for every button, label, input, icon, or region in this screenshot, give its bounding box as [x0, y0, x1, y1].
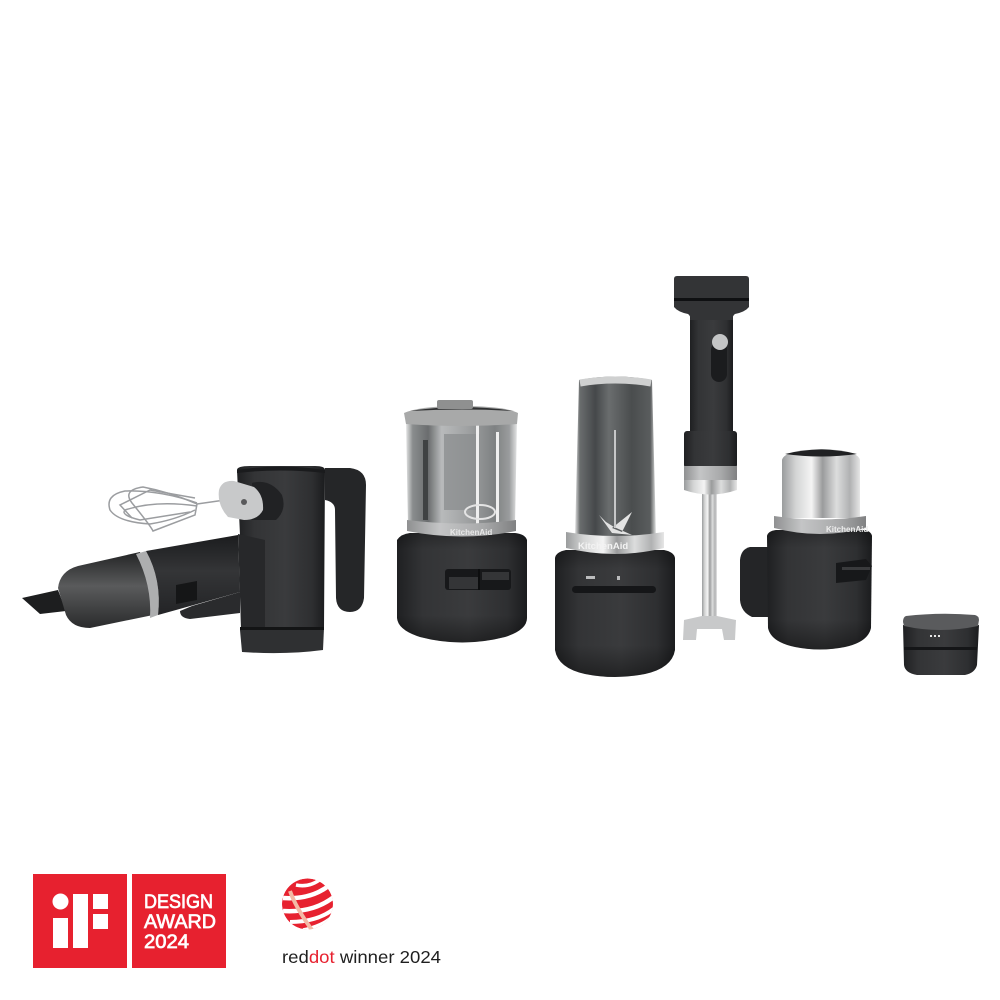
vacuum silver ring [136, 551, 159, 618]
design award square: DESIGN [144, 892, 213, 913]
mixer body side facet [238, 534, 265, 628]
chopper base [397, 533, 527, 642]
hand blender switch [711, 342, 727, 382]
mixer handle [325, 468, 366, 612]
chopper blades [465, 505, 495, 519]
chopper lid knob [437, 400, 473, 409]
vacuum vent [176, 581, 197, 604]
grinder battery [740, 547, 770, 617]
mixer top rim [237, 466, 325, 473]
design award square [132, 874, 226, 968]
blender cup [575, 376, 656, 537]
charger lights [930, 635, 940, 637]
charger body [903, 625, 979, 675]
iF design award badge [33, 874, 226, 968]
vacuum transparent canister [58, 552, 158, 628]
red dot sphere [282, 878, 335, 930]
product: food chopper [397, 400, 527, 642]
blender ring [566, 532, 664, 554]
mixer drive socket [219, 481, 263, 520]
chopper ring [407, 520, 516, 536]
chopper switch [445, 569, 511, 590]
product: hand vacuum [22, 535, 240, 628]
product: battery charger [903, 614, 979, 675]
mixer whisk [109, 487, 225, 531]
grinder steel bowl [782, 449, 860, 518]
hand blender collar [684, 431, 737, 468]
blender logo: KitchenAid [578, 541, 628, 552]
hand blender head [674, 276, 749, 320]
product: coffee grinder [740, 449, 872, 650]
hand blender foot [683, 616, 736, 640]
chopper glass bowl [406, 420, 517, 525]
blender base [555, 550, 675, 677]
red dot caption: reddot winner 2024 [282, 947, 441, 967]
product: personal blender [555, 376, 675, 677]
vacuum nozzle [22, 590, 66, 614]
chopper logo: KitchenAid [450, 528, 492, 537]
hand blender handle [690, 308, 733, 433]
vacuum battery [180, 592, 240, 619]
red dot award [282, 878, 441, 967]
grinder switch [836, 559, 872, 583]
product: hand blender [674, 276, 749, 640]
mixer drive cylinder [252, 482, 284, 520]
hand blender button [712, 334, 728, 350]
hand blender ring [684, 466, 737, 480]
mixer base [240, 628, 324, 653]
mixer body [237, 466, 325, 628]
charger top [903, 614, 979, 630]
grinder ring [774, 516, 866, 534]
chopper lid [404, 406, 518, 426]
blender blade [599, 512, 632, 535]
vacuum motor body [146, 535, 240, 615]
hand blender chrome [684, 480, 737, 494]
design award square: AWARD [144, 912, 216, 933]
product: hand mixer [109, 466, 366, 653]
chopper inner core [444, 434, 480, 510]
blender buttons [572, 586, 656, 593]
hand blender shaft [702, 493, 717, 618]
design award square: 2024 [144, 932, 189, 953]
grinder logo: KitchenAid [826, 525, 868, 534]
grinder base [767, 530, 872, 650]
iF logo square [33, 874, 127, 968]
